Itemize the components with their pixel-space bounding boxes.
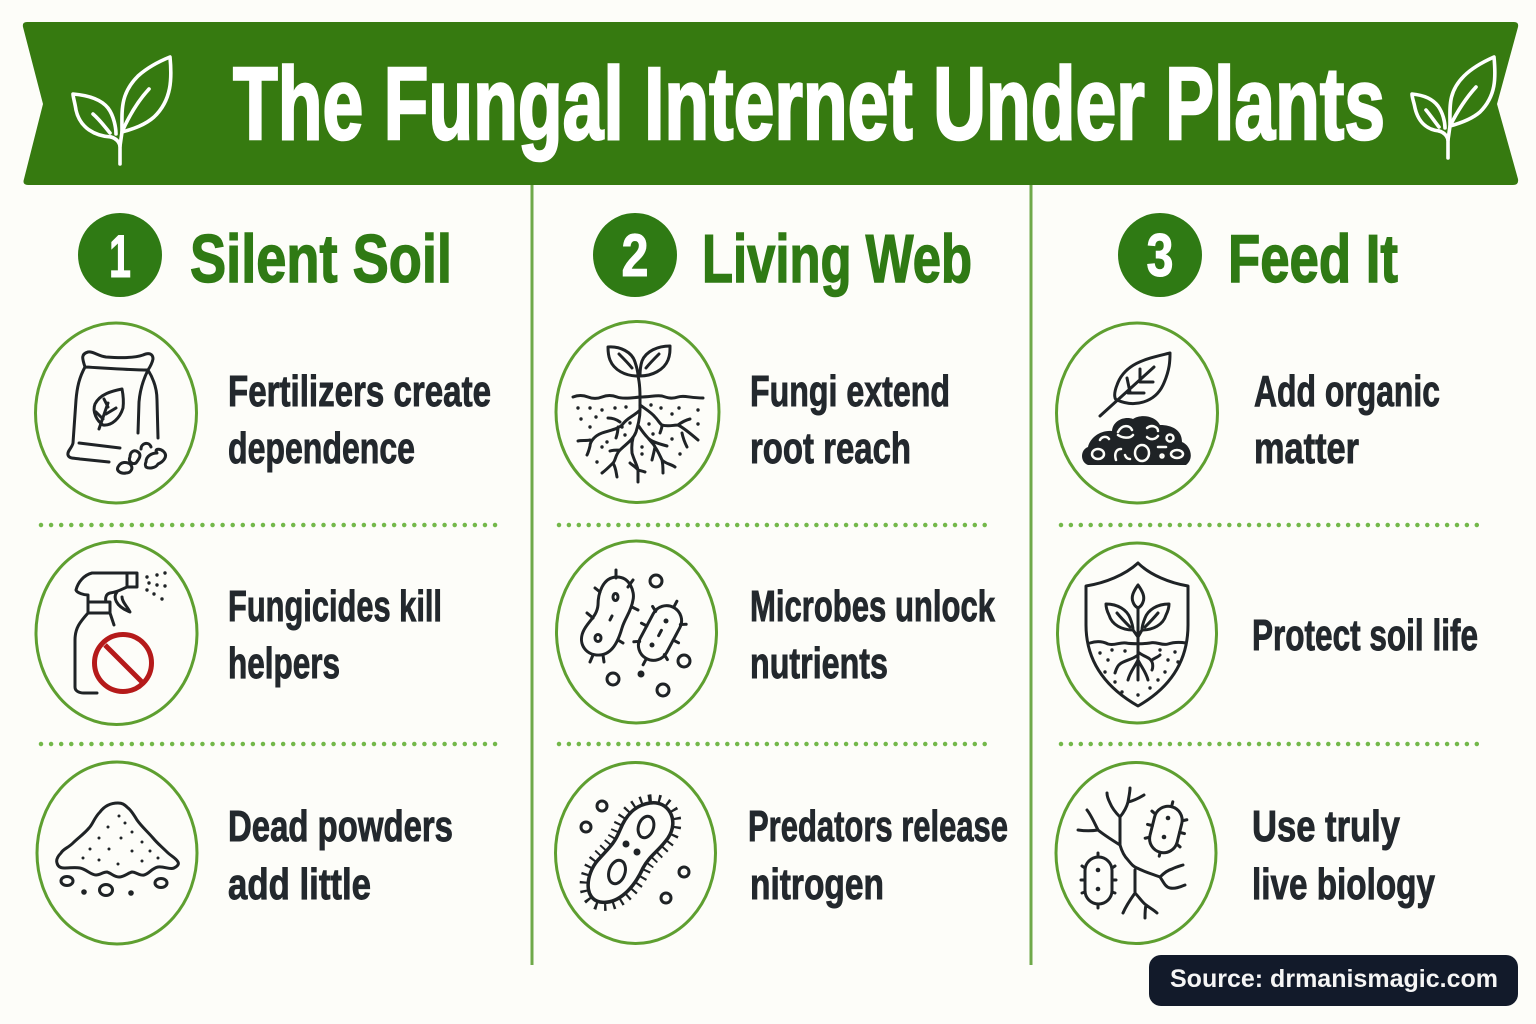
text: Predators release nitrogen — [748, 802, 1008, 909]
heading: Silent Soil: Silent Soil — [190, 221, 452, 297]
panel: Silent Soil — [36, 213, 491, 944]
icon: spray bottle with prohibition sign — [36, 542, 197, 724]
text: Add organic matter — [1254, 367, 1440, 473]
icon: shield with plant — [1058, 543, 1216, 723]
text: Fertilizers create dependence: dependence — [228, 424, 415, 473]
text: Fungi extend root reach: root reach — [750, 424, 911, 473]
text: Use truly live biology: Use truly — [1252, 802, 1400, 851]
heading: Feed It — [1118, 213, 1398, 297]
heading: Living Web — [593, 213, 972, 297]
icon: fertilizer bag — [36, 323, 196, 503]
text: Microbes unlock nutrients — [750, 582, 995, 688]
icon: fungal hyphae and live microbes — [1056, 762, 1216, 944]
text: Dead powders add little — [228, 802, 453, 909]
text: Add organic matter: Add organic — [1254, 367, 1440, 416]
text: Predators release nitrogen: nitrogen — [750, 860, 884, 909]
text: Fungicides kill helpers — [228, 582, 442, 688]
heading: Feed It: 3 — [1146, 222, 1174, 289]
heading: Living Web: Living Web — [702, 221, 972, 297]
source badge: Source: drmanismagic.com — [1170, 965, 1498, 993]
icon: right sprout — [1412, 57, 1495, 158]
text: Fungi extend root reach: Fungi extend — [750, 367, 950, 416]
heading: Silent Soil: 1 — [109, 223, 131, 290]
text: Fungicides kill helpers: Fungicides kill — [228, 582, 442, 631]
text: Use truly live biology: live biology — [1252, 860, 1435, 909]
text: Microbes unlock nutrients: nutrients — [750, 639, 888, 688]
text: Use truly live biology — [1252, 802, 1435, 909]
icon: plant roots with fungi — [556, 322, 719, 502]
heading: Living Web: 2 — [622, 222, 648, 289]
icon: powder pile — [37, 762, 197, 944]
text: Add organic matter: matter — [1254, 424, 1359, 473]
title banner — [23, 22, 1518, 185]
icon: microbes — [556, 541, 716, 723]
text: Fertilizers create dependence: Fertilizers create — [228, 367, 491, 416]
text: Fertilizers create dependence — [228, 367, 491, 473]
text: Dead powders add little: add little — [228, 860, 371, 909]
text: Fungicides kill helpers: helpers — [228, 639, 340, 688]
icon: protozoan predator — [556, 762, 716, 944]
icon: left sprout — [73, 57, 171, 164]
panel: Living Web — [556, 213, 1008, 944]
text: Microbes unlock nutrients: Microbes unlock — [750, 582, 995, 631]
text: Dead powders add little: Dead powders — [228, 802, 453, 851]
source badge — [1149, 955, 1518, 1006]
heading: Feed It: Feed It — [1228, 221, 1398, 297]
panel: Feed It — [1056, 213, 1478, 944]
text: Predators release nitrogen: Predators release — [748, 802, 1008, 851]
heading: Silent Soil — [78, 213, 452, 297]
text: Fungi extend root reach — [750, 367, 950, 473]
icon: leaf and compost pile — [1056, 323, 1218, 503]
